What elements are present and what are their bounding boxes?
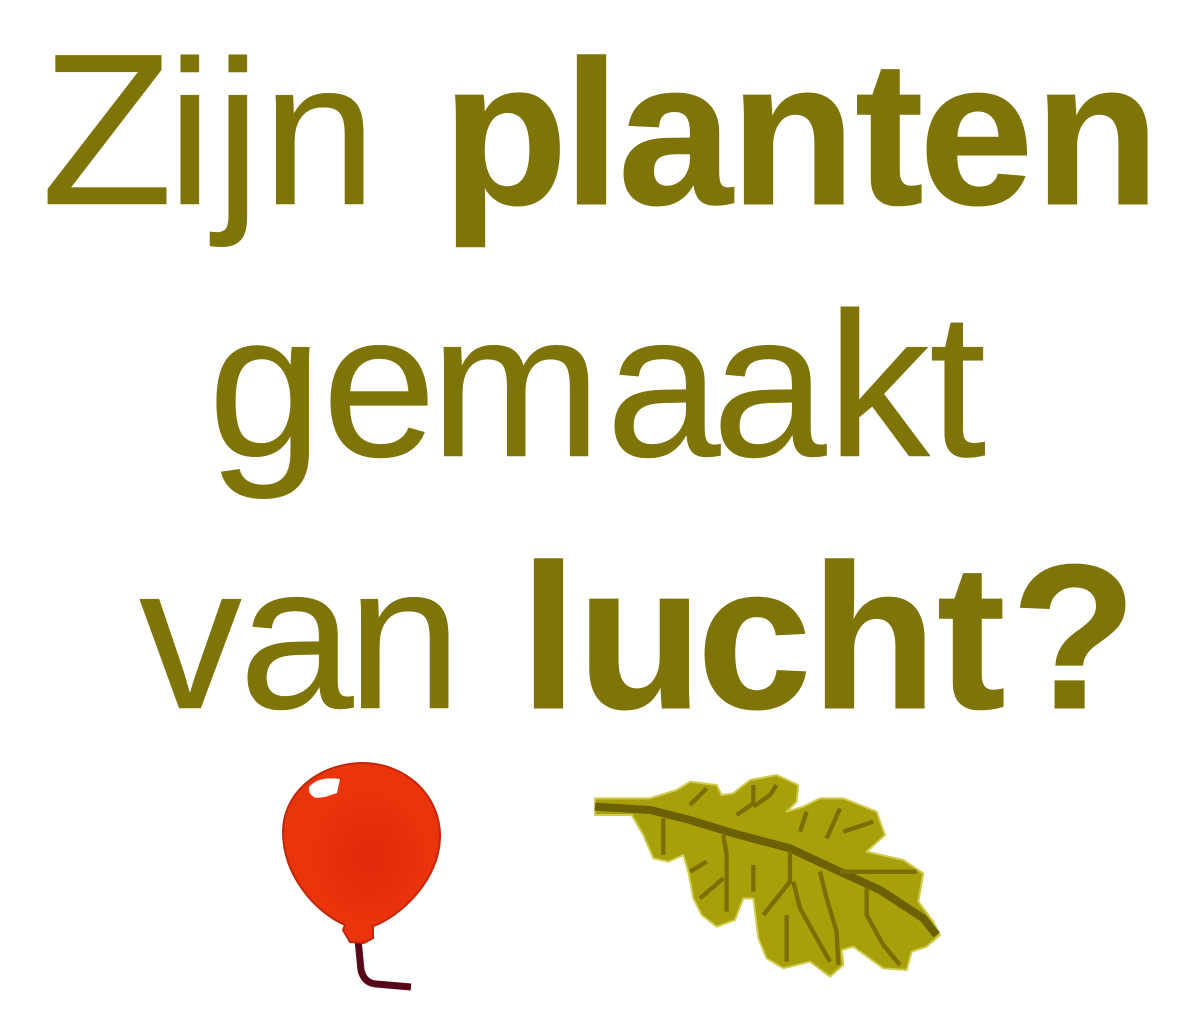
title word: van: van: [139, 522, 462, 752]
title word: lucht?: lucht?: [520, 522, 1137, 752]
title word: Zijn: Z: [41, 8, 173, 250]
title word: Zijn: ijn: [167, 18, 377, 248]
title word: gemaakt: gemaakt: [208, 270, 986, 500]
title word: planten: planten: [442, 18, 1160, 248]
title: [41, 8, 1160, 752]
icon: red balloon: [283, 763, 440, 987]
icon: oak leaf: [595, 775, 940, 977]
